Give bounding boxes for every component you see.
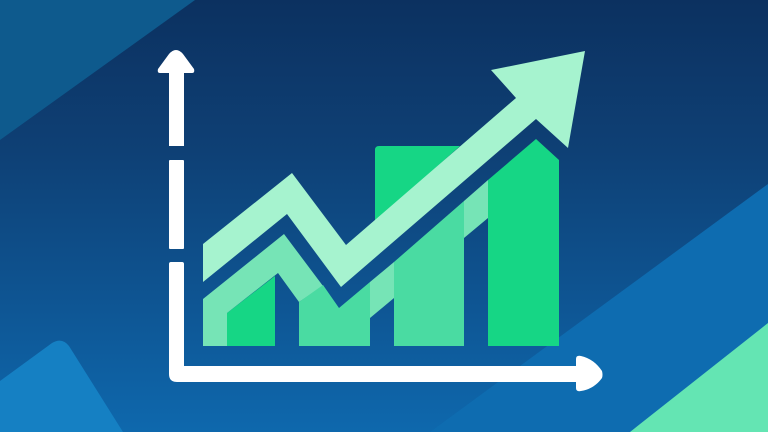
ribbon: left section — [203, 234, 323, 346]
chart axes — [158, 50, 602, 391]
decorative shape: bottom left — [0, 341, 123, 432]
decorative corner: green — [630, 323, 768, 432]
bar: first — [227, 276, 275, 346]
bar: third — [394, 201, 464, 346]
decorative band: right — [430, 184, 768, 432]
y axis arrow — [158, 50, 194, 146]
bar: fourth — [488, 139, 559, 346]
y axis dash — [169, 160, 184, 249]
decorative band: top left — [0, 0, 195, 140]
x and y axis corner with arrow — [169, 262, 602, 391]
bars — [203, 139, 559, 346]
ribbon: link between second and third bars — [370, 262, 394, 318]
bar: tall back bar — [375, 146, 460, 222]
rising trend arrow — [203, 51, 585, 287]
bar: second — [299, 282, 370, 346]
ribbon: link between third and fourth bars — [464, 180, 488, 238]
